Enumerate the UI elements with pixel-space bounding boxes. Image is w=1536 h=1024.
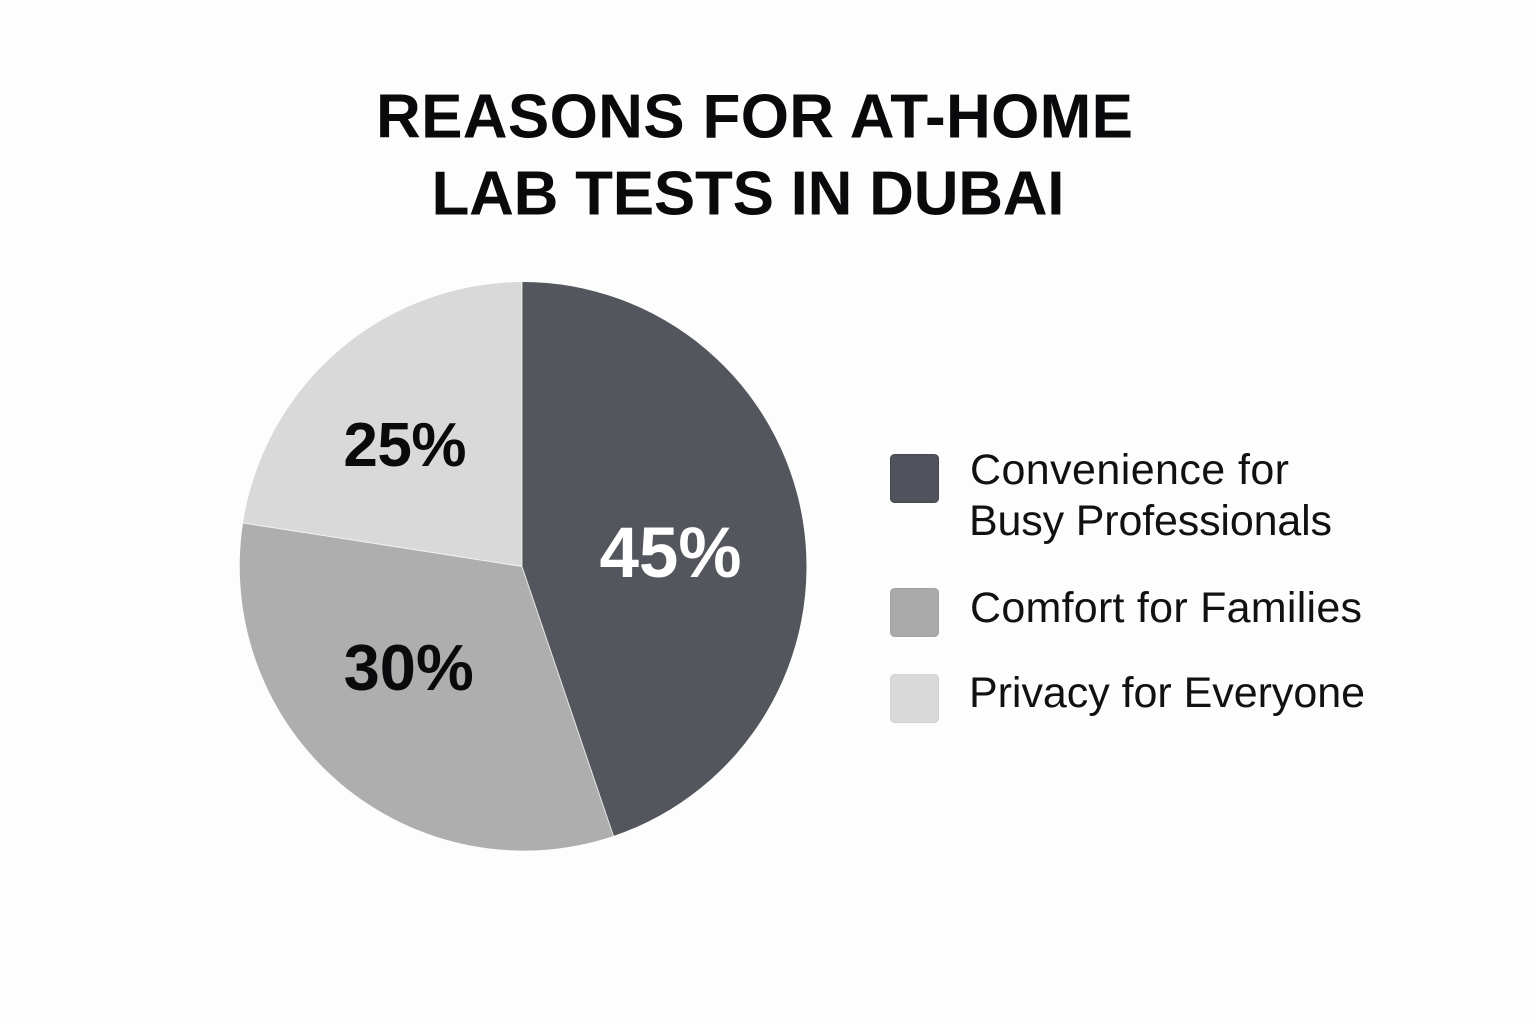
- legend item: privacy: Privacy for Everyone: [969, 669, 1365, 717]
- slice: 25% privacy: [243, 282, 522, 566]
- title: LAB TESTS IN DUBAI: [432, 160, 1064, 228]
- slice: 30% comfort: [240, 523, 613, 851]
- title: [376, 82, 1133, 228]
- pie chart: [240, 282, 807, 851]
- label: 30%: 30%: [344, 631, 474, 704]
- slice: 45% convenience: [522, 282, 807, 836]
- legend item: comfort: Comfort for Families: [970, 584, 1362, 632]
- label: 25%: 25%: [343, 411, 466, 480]
- legend item: convenience: [890, 446, 1332, 545]
- title: REASONS FOR AT-HOME: [376, 82, 1133, 152]
- label: 45%: 45%: [599, 514, 742, 593]
- legend: [890, 446, 1365, 722]
- legend item: convenience: Convenience for: [970, 446, 1289, 494]
- legend item: convenience: Busy Professionals: [969, 497, 1332, 545]
